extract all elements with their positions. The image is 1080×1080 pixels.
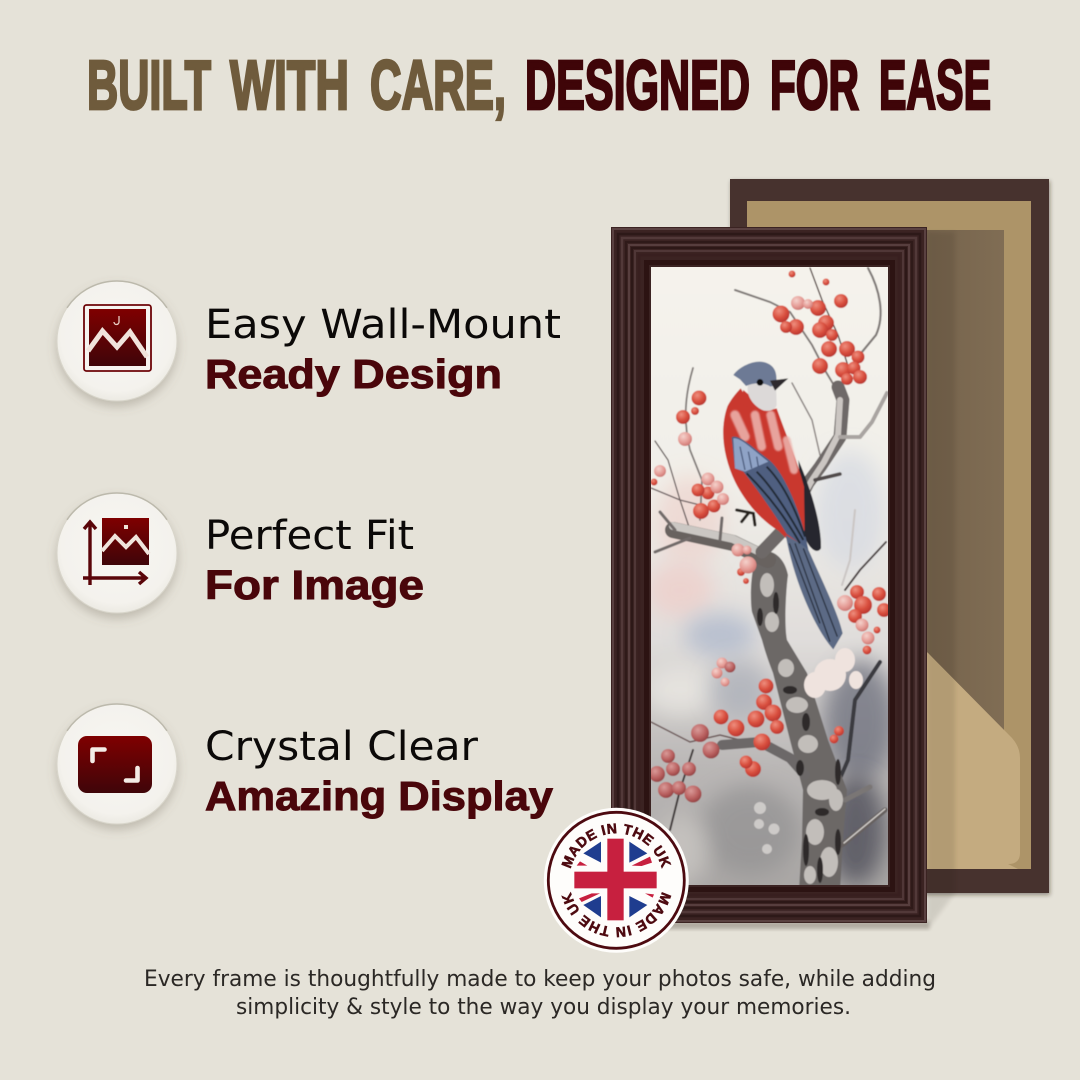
title: FOR (770, 46, 859, 124)
text: Easy Wall-Mount: Easy Wall-Mount (205, 302, 561, 348)
title: EASE (879, 46, 991, 124)
dusky berries (649, 662, 736, 802)
backing flap (900, 630, 1020, 869)
text: Ready Design: Ready Design (205, 351, 502, 397)
text: Crystal Clear: Crystal Clear (205, 724, 479, 770)
bark light patches (760, 573, 843, 884)
title: BUILT (87, 46, 211, 124)
framed painting (611, 227, 927, 923)
icon: picture with dimension arrows (57, 493, 177, 613)
feature: perfect fit (57, 493, 424, 613)
badge: made in the UK (544, 808, 689, 953)
paint droplets (754, 802, 780, 854)
badge text top: MADE IN THE UK (561, 823, 672, 869)
frame cast shadows (625, 232, 955, 930)
text: Perfect Fit: Perfect Fit (205, 513, 414, 559)
icon: wall mount picture (57, 281, 177, 401)
union flag (574, 839, 657, 920)
painting: bird on branch (644, 260, 896, 892)
tree trunk and branches (655, 387, 887, 890)
title: WITH (230, 46, 349, 124)
watercolor washes (644, 450, 896, 885)
pale berries (654, 296, 874, 686)
blossoms (804, 648, 863, 698)
frame back panel (730, 179, 1049, 893)
feature: crystal clear (57, 704, 553, 824)
footer text: Every frame is thoughtfully made to keep your photos safe, while adding (144, 967, 936, 992)
title (87, 46, 991, 124)
text: For Image: For Image (205, 562, 424, 608)
footer text (144, 967, 936, 1020)
feature: wall mount (57, 281, 561, 401)
title: CARE, (370, 46, 506, 124)
footer text: simplicity & style to the way you display your memories. (236, 995, 851, 1020)
twigs (651, 268, 886, 830)
cardboard backing (747, 201, 1031, 869)
bark dark crevices (757, 592, 841, 883)
badge text bottom: MADE IN THE UK (561, 892, 672, 938)
text: Amazing Display: Amazing Display (205, 773, 553, 819)
title: DESIGNED (525, 46, 750, 124)
backing recess (880, 230, 1004, 735)
berries (650, 270, 891, 777)
wooden moulding (611, 227, 927, 923)
icon: expand display (57, 704, 177, 824)
bird (723, 362, 843, 649)
